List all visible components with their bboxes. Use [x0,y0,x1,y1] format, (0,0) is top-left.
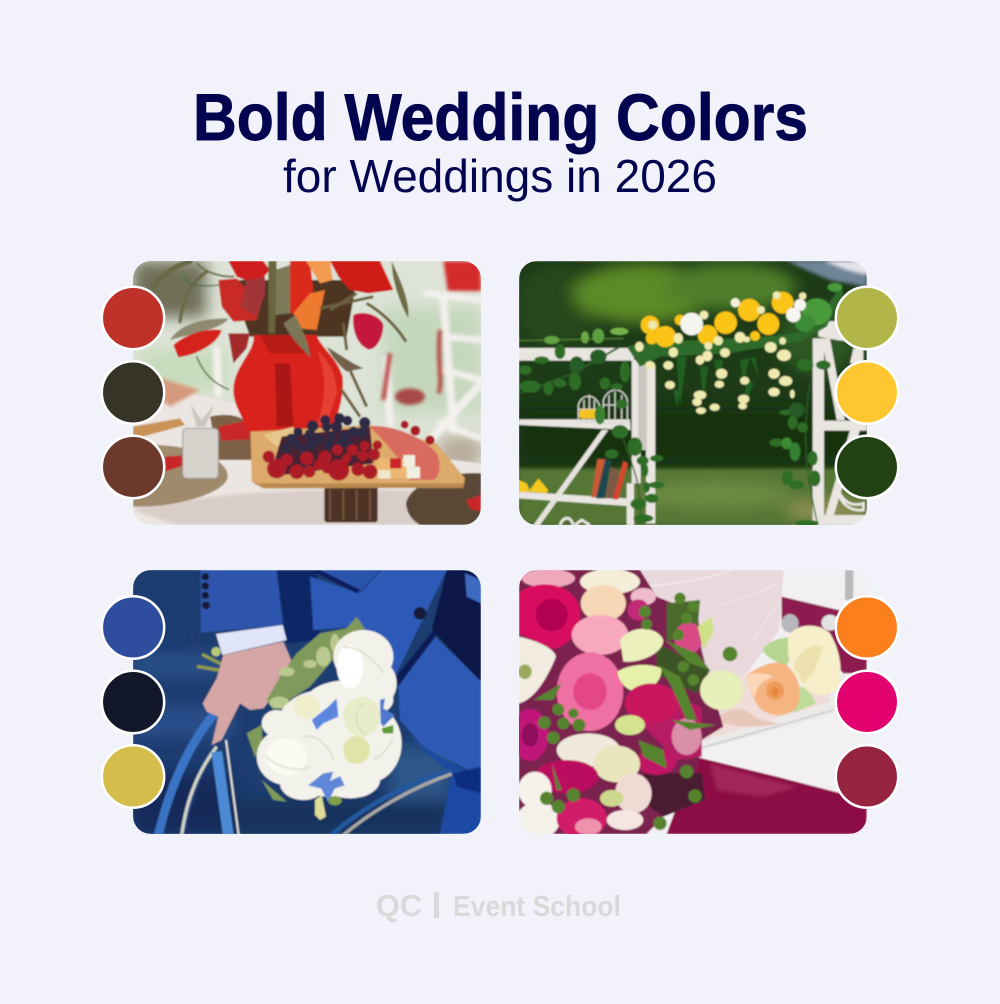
sub-element: hand [203,642,294,745]
sub-element: blue suit jacket [201,570,481,834]
sub-element: wood tray and fruit [251,413,465,522]
swatches: blue photo palette [102,596,164,808]
swatches: red photo palette [102,287,164,498]
sub-element: books [591,459,628,499]
sub-element: sugar flowers on cake [713,626,841,727]
sub-element: vines and leaves [518,283,843,527]
sub-element: shirt cuff [216,625,287,655]
sub-element: white blooms and buds [635,291,806,414]
footer logo [376,888,621,923]
sub-element: white peony bouquet [247,617,402,820]
rose blooms [522,569,575,588]
sub-element: mixed rose bouquet [512,569,743,838]
footer logo: QC [376,888,422,923]
title [193,80,808,202]
panel: yellow floral arch photo [517,261,870,527]
title: for Weddings in 2026 [283,150,717,202]
panel: pink roses and cake photo [512,569,867,838]
sub-element: white wooden frame [519,320,867,525]
sub-element: burgundy table runner [667,597,867,834]
sub-element: red vase [233,335,343,432]
sub-element: bird cages [578,390,627,423]
sub-element: glass [183,403,218,478]
sub-element: yellow blooms [641,292,794,347]
leaves and berries [533,593,737,830]
panel: blue suit and bouquet photo [133,570,481,835]
sub-element: flowers and leaves [170,261,409,417]
sub-element: fondant cake [637,570,853,742]
panel: red table setting photo [133,261,481,525]
sub-element: chrome railing [158,705,452,835]
swatches: yellow-green photo palette [836,287,898,498]
swatches: pink photo palette [836,596,898,808]
sub-element: placemats [133,415,481,525]
title: Bold Wedding Colors [193,80,808,154]
footer logo: Event School [453,891,621,923]
